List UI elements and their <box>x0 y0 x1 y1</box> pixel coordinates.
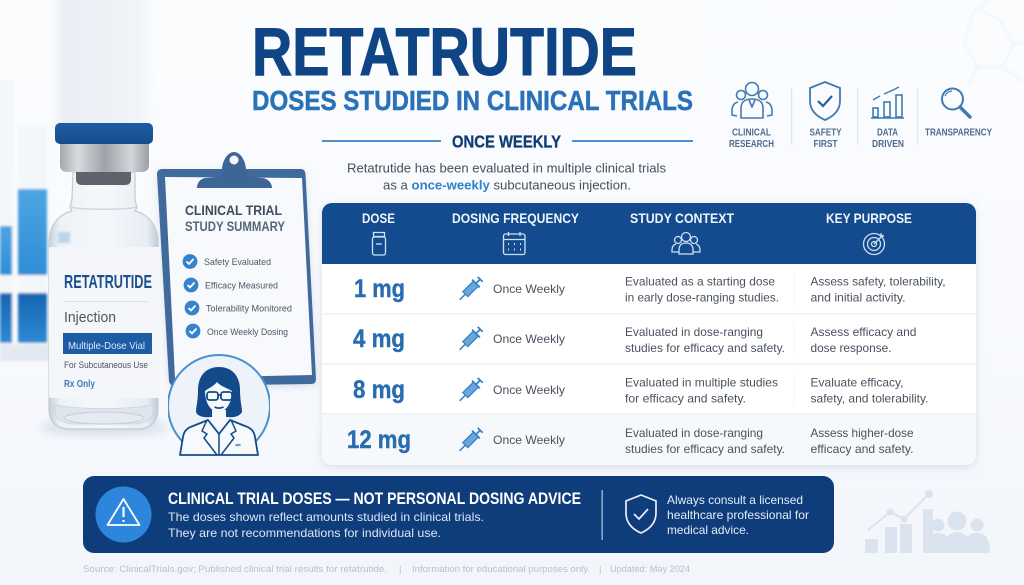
glasses <box>207 392 232 408</box>
icon: syringe <box>456 275 484 304</box>
intro text: Retatrutide has been evaluated in multiple clinical trials <box>347 160 666 176</box>
row: 8 mg <box>353 376 928 406</box>
label: clinical research: CLINICAL <box>732 128 771 138</box>
banner heading: CLINICAL TRIAL DOSES — NOT PERSONAL DOSING ADVICE <box>168 490 581 508</box>
vial <box>40 123 168 435</box>
row: 1 mg: and initial activity. <box>810 290 906 304</box>
consult text: medical advice. <box>667 523 749 537</box>
hair <box>196 367 242 417</box>
table header <box>322 203 976 264</box>
vial label: Rx Only <box>64 379 95 390</box>
face <box>205 382 232 412</box>
table header: DOSING FREQUENCY <box>452 210 580 226</box>
table header: KEY PURPOSE <box>826 210 912 226</box>
label: clinical research <box>729 128 774 150</box>
watermark chart and people icon <box>865 490 990 553</box>
vial label <box>49 247 160 398</box>
banner text: The doses shown reflect amounts studied in clinical trials. <box>168 510 484 524</box>
icon: target <box>864 233 884 254</box>
row: 1 mg: in early dose-ranging studies. <box>625 290 779 304</box>
icon: magnifier <box>942 88 970 117</box>
footer source line: | <box>399 564 401 575</box>
label: safety first <box>810 128 842 150</box>
blurred lab background and test tubes <box>0 0 146 361</box>
vial base <box>55 404 153 424</box>
table header: STUDY CONTEXT <box>630 210 734 226</box>
row: 8 mg: Evaluated in multiple studies <box>625 376 778 390</box>
icon: syringe <box>456 325 484 354</box>
row: 4 mg <box>353 325 916 355</box>
icon: data chart <box>871 87 904 118</box>
row: 4 mg: studies for efficacy and safety. <box>625 341 785 355</box>
footer source line: Source: ClinicalTrials.gov; Published clinical trial results for retatrutide. <box>83 564 387 575</box>
icon: people <box>672 232 700 254</box>
label: safety first: FIRST <box>814 139 838 150</box>
row dividers <box>322 314 976 414</box>
lab coat <box>180 420 258 455</box>
row: 12 mg: Assess higher-dose <box>810 426 914 440</box>
row: 1 mg <box>354 274 946 304</box>
icon: syringe <box>456 426 484 455</box>
footer source line: Information for educational purposes only. <box>412 564 590 575</box>
icon: warning <box>96 486 152 542</box>
intro text: as a once-weekly subcutaneous injection. <box>383 178 631 192</box>
row: 8 mg: Once Weekly <box>493 383 565 397</box>
table header: DOSE <box>362 210 395 226</box>
row: 1 mg: 1 mg <box>354 275 405 303</box>
row: 1 mg: Assess safety, tolerability, <box>810 274 946 288</box>
icon: safety shield <box>810 82 840 120</box>
label: safety first: SAFETY <box>810 128 842 138</box>
vial label: RETATRUTIDE <box>64 272 152 292</box>
vial glass body <box>49 172 158 429</box>
clipboard heading: CLINICAL TRIAL <box>185 203 282 218</box>
row: 8 mg: Evaluate efficacy, <box>810 376 904 390</box>
label: data driven <box>872 128 904 150</box>
row: 1 mg: Once Weekly <box>493 282 565 296</box>
footer source line: | <box>599 564 601 575</box>
intro text <box>347 160 666 192</box>
consult text <box>667 493 809 537</box>
label: clinical research: RESEARCH <box>729 139 774 150</box>
consult text: healthcare professional for <box>667 508 809 522</box>
faint molecule network <box>964 0 1024 85</box>
icon: clinical research <box>732 82 772 118</box>
footer source line: Updated: May 2024 <box>610 564 690 575</box>
subtitle: DOSES STUDIED IN CLINICAL TRIALS <box>252 85 693 116</box>
row: 8 mg: safety, and tolerability. <box>810 392 928 406</box>
title: RETATRUTIDE <box>252 14 637 90</box>
label: transparency: TRANSPARENCY <box>925 128 992 138</box>
icon: calendar <box>504 232 525 254</box>
clipboard clip <box>197 152 272 188</box>
banner text: They are not recommendations for individual use. <box>168 526 441 540</box>
clipboard checklist: Tolerability Monitored <box>206 304 292 314</box>
top-right icon strip <box>729 82 992 150</box>
footer source line <box>83 564 690 575</box>
doctor avatar <box>168 355 270 457</box>
clipboard checklist: Once Weekly Dosing <box>207 327 288 338</box>
row: 1 mg: Evaluated as a starting dose <box>625 274 775 288</box>
row: 12 mg: efficacy and safety. <box>810 442 914 456</box>
icon: shield <box>626 495 656 533</box>
clipboard panel <box>157 152 316 386</box>
vial cap <box>55 123 153 144</box>
row: 12 mg <box>347 426 914 456</box>
consult text: Always consult a licensed <box>667 493 803 507</box>
row: 8 mg: 8 mg <box>353 376 405 404</box>
row: 12 mg: Evaluated in dose-ranging <box>625 426 763 440</box>
row: 4 mg: dose response. <box>810 341 892 355</box>
row: 12 mg: Once Weekly <box>493 433 565 447</box>
row: 4 mg: Assess efficacy and <box>810 325 916 339</box>
vial label: Injection <box>64 309 116 326</box>
disclaimer banner <box>83 476 834 553</box>
clipboard heading: STUDY SUMMARY <box>185 219 285 234</box>
row: 12 mg: studies for efficacy and safety. <box>625 442 785 456</box>
dose table <box>322 203 976 465</box>
row: 4 mg: Once Weekly <box>493 332 565 346</box>
row: 4 mg: Evaluated in dose-ranging <box>625 325 763 339</box>
clipboard checklist <box>183 254 292 338</box>
icon: vial <box>372 232 386 255</box>
row: 12 mg: 12 mg <box>347 426 411 454</box>
row: 4 mg: 4 mg <box>353 325 405 353</box>
clipboard checklist: Safety Evaluated <box>204 257 271 268</box>
once weekly heading: ONCE WEEKLY <box>452 132 561 152</box>
vial stopper <box>76 171 131 185</box>
vial label: For Subcutaneous Use <box>64 360 148 371</box>
vial metal collar <box>60 142 149 172</box>
icon: syringe <box>456 376 484 405</box>
label: data driven: DATA <box>877 128 898 138</box>
vial label: Multiple-Dose Vial <box>68 340 145 352</box>
faint dot pattern <box>700 0 960 70</box>
label: data driven: DRIVEN <box>872 139 904 150</box>
clipboard heading <box>185 203 285 234</box>
clipboard checklist: Efficacy Measured <box>205 280 278 292</box>
banner text <box>168 510 484 540</box>
row: 8 mg: for efficacy and safety. <box>625 392 746 406</box>
